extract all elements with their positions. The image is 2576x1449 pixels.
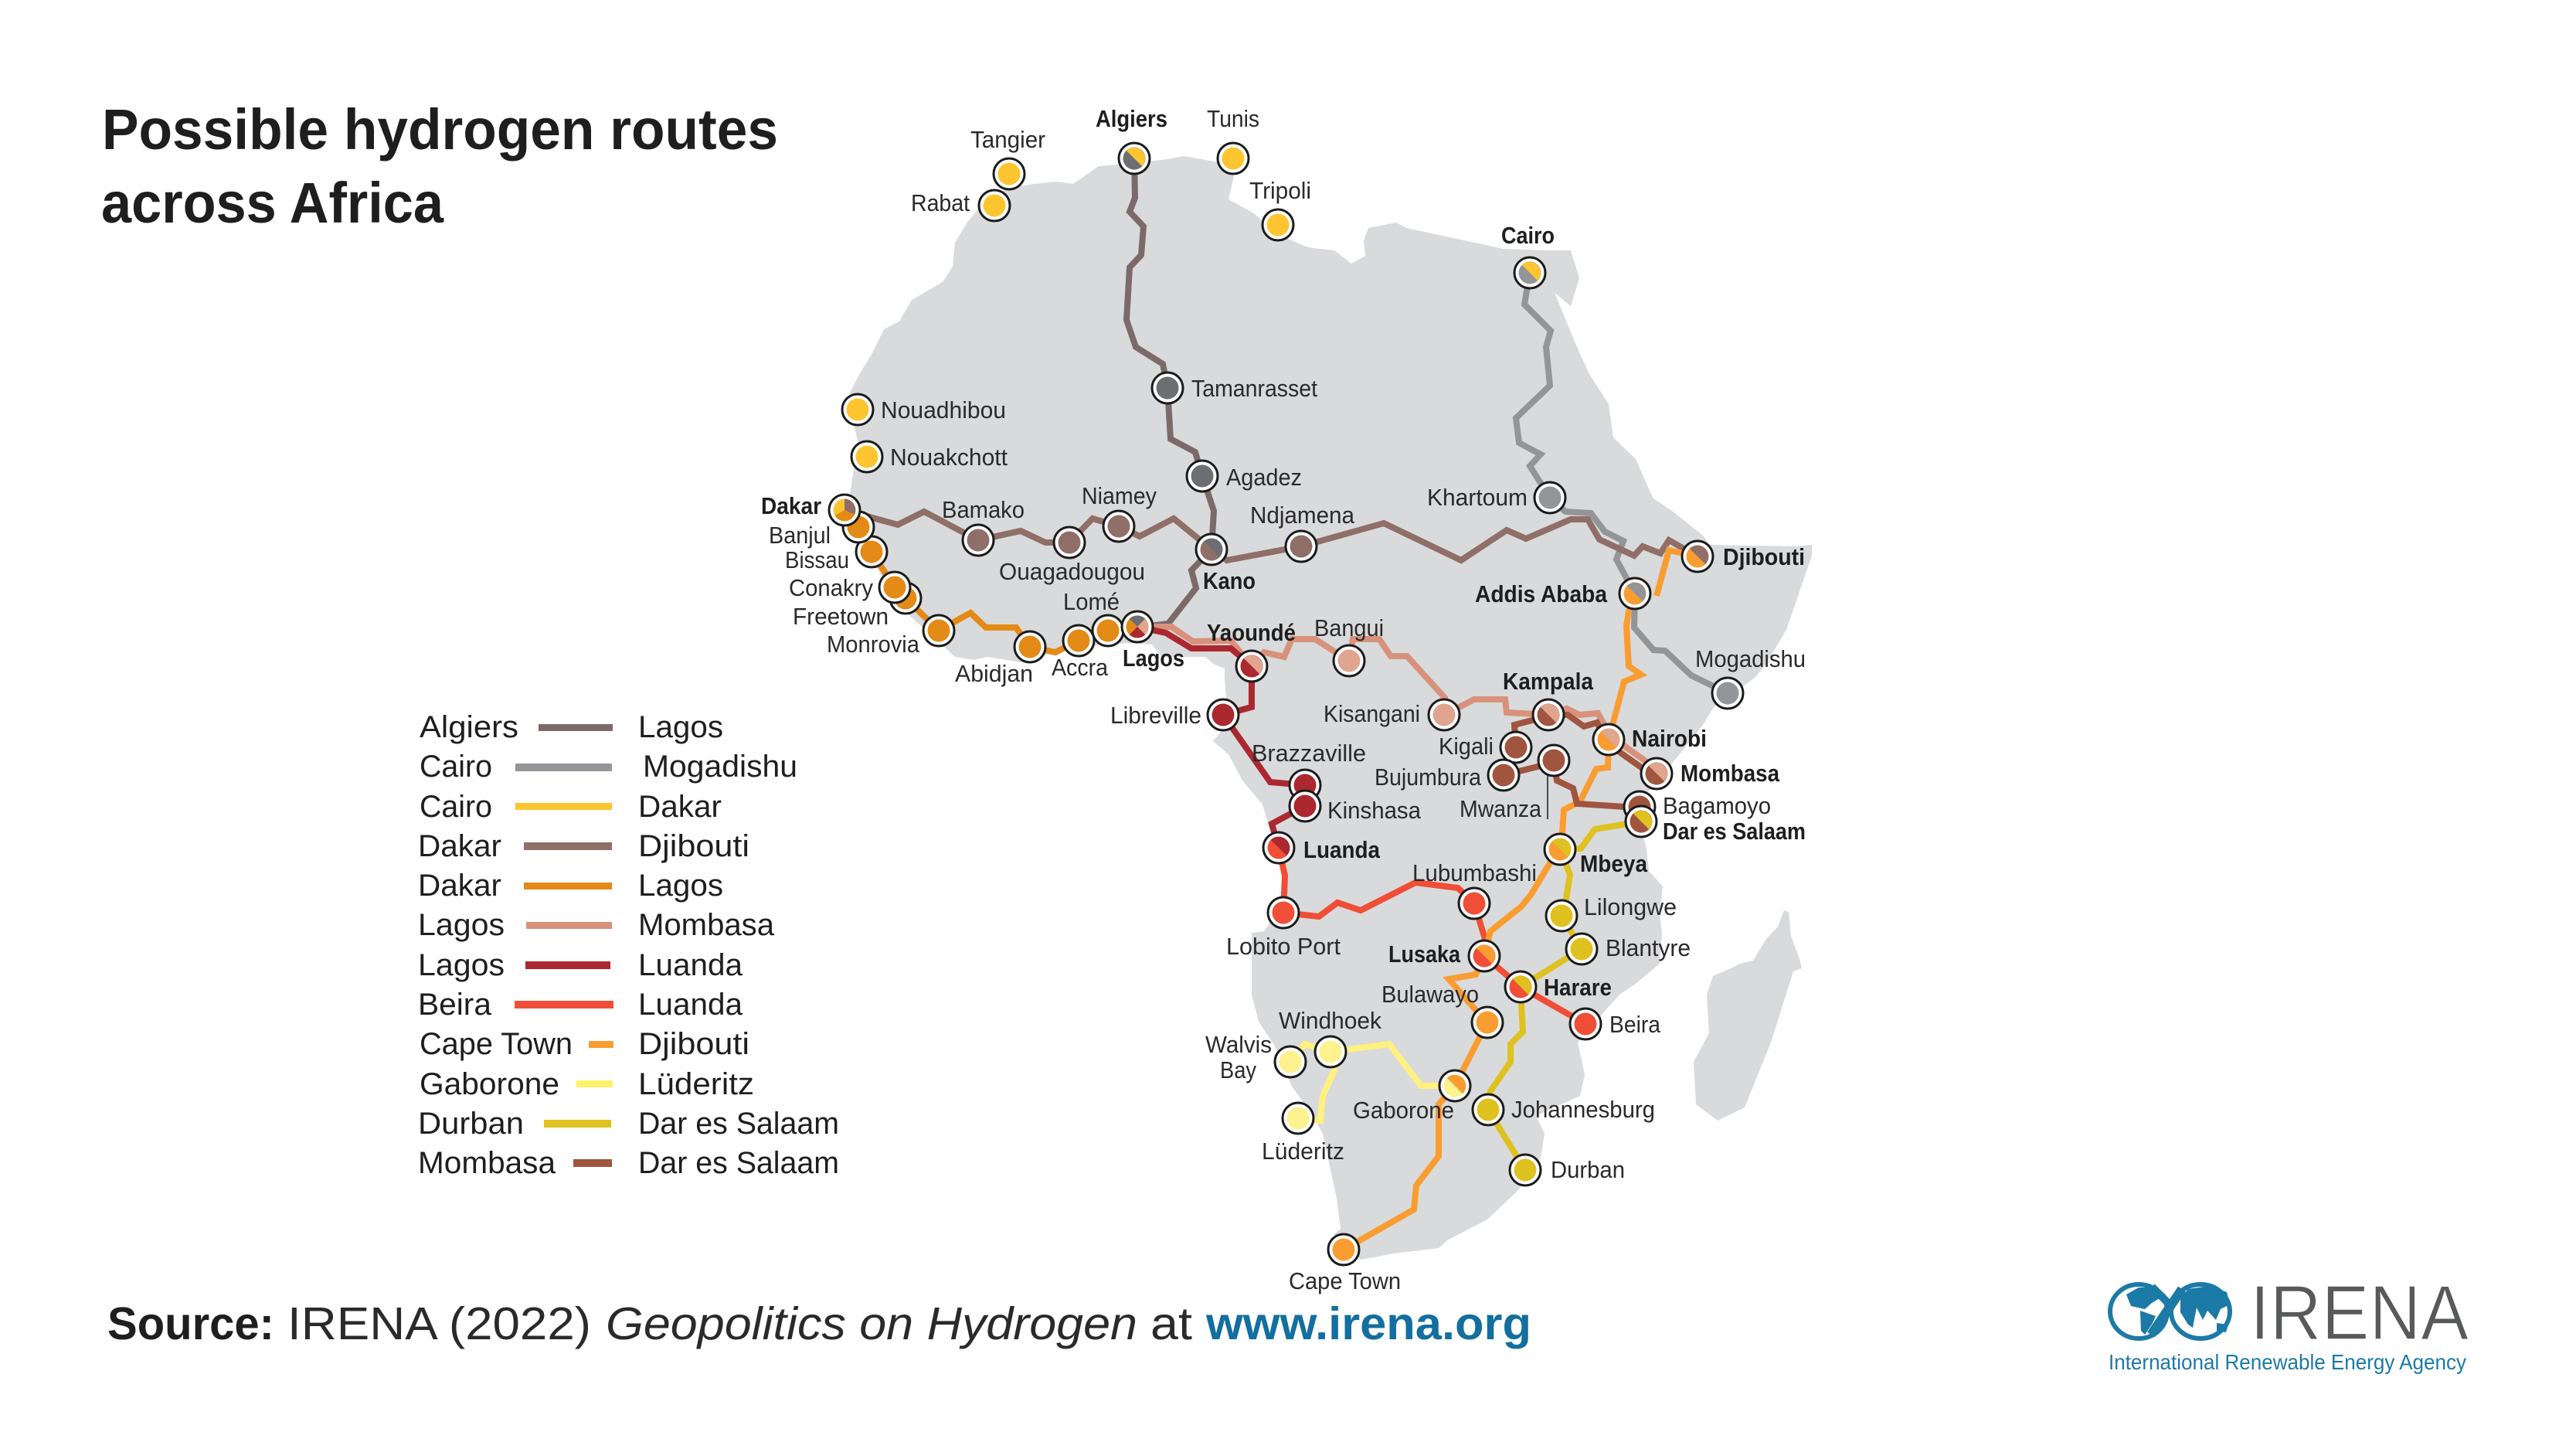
node: Lusaka: Lusaka (1388, 940, 1461, 968)
legend row: Algiers to Lagos: Lagos (638, 710, 723, 744)
node: Luderitz (1262, 1103, 1344, 1165)
legend row: Cairo to Dakar (420, 790, 722, 824)
node: Bamako: Bamako (942, 496, 1025, 523)
node: Mombasa (1641, 758, 1780, 789)
node: Niamey: Niamey (1082, 482, 1157, 509)
source line: Geopolitics on Hydrogen (606, 1298, 1137, 1349)
legend row: Mombasa to Dar es Salaam (418, 1146, 839, 1180)
source line: IRENA (2022) (287, 1298, 591, 1349)
node: Khartoum: Khartoum (1427, 484, 1528, 511)
node: Nouadhibou: Nouadhibou (881, 396, 1006, 423)
node: Nouadhibou (842, 394, 1006, 425)
legend row: Cairo to Mogadishu (420, 750, 797, 784)
node: Kisangani: Kisangani (1324, 700, 1420, 727)
node: Lubumbashi (1412, 859, 1537, 919)
node: Beira: Beira (1609, 1011, 1661, 1038)
title: Possible hydrogen routes (102, 97, 778, 162)
node: Agadez: Agadez (1226, 464, 1302, 491)
node: Dakar (761, 492, 860, 526)
node: Cape Town: Cape Town (1289, 1267, 1401, 1294)
node: Nairobi (1593, 724, 1707, 755)
node: Bangui: Bangui (1314, 614, 1384, 641)
node: Dakar: Dakar (761, 492, 821, 519)
node: Kigali (1439, 732, 1531, 763)
node: Mbeya (1545, 834, 1648, 877)
route: Cairo to Mogadishu (1516, 273, 1728, 693)
legend row: Cape Town to Djibouti (420, 1027, 749, 1061)
node: Blantyre: Blantyre (1606, 934, 1691, 961)
node: Mogadishu (1695, 645, 1806, 709)
route: Dakar to Lagos (845, 510, 1137, 652)
node: Agadez (1187, 461, 1302, 492)
node: Conakry: Conakry (789, 574, 873, 601)
legend row: Cairo to Mogadishu: Mogadishu (643, 750, 797, 784)
node: Bagamoyo (1624, 791, 1771, 822)
node: Beira (1570, 1009, 1661, 1039)
node: Lobito Port (1226, 897, 1341, 960)
source line (107, 1298, 1531, 1349)
node: Lagos: Lagos (1123, 645, 1184, 672)
node: Tripoli (1249, 177, 1311, 240)
node: Banjul: Banjul (769, 522, 831, 549)
land: Madagascar (1694, 910, 1802, 1121)
node: Luderitz: Lüderitz (1262, 1138, 1344, 1165)
node: Tripoli: Tripoli (1249, 177, 1311, 204)
node: Cairo: Cairo (1501, 222, 1555, 249)
node: Algiers (1096, 105, 1167, 174)
legend row: Lagos to Luanda (418, 948, 743, 982)
node: Abidjan: Abidjan (955, 660, 1033, 687)
node: Durban: Durban (1551, 1156, 1625, 1183)
node: Cape Town (1289, 1234, 1401, 1294)
title: across Africa (101, 171, 444, 235)
node: Tangier: Tangier (970, 126, 1045, 153)
node: Djibouti: Djibouti (1723, 543, 1805, 570)
node: Kampala (1503, 668, 1594, 730)
legend row: Cairo to Dakar: Dakar (638, 790, 722, 824)
node: Johannesburg (1473, 1094, 1655, 1125)
node: Yaounde: Yaoundé (1207, 619, 1296, 646)
node: Yaounde (1207, 619, 1296, 682)
node: Mombasa: Mombasa (1681, 760, 1780, 787)
node: Tamanrasset (1152, 372, 1317, 403)
node: Lobito Port: Lobito Port (1226, 933, 1341, 960)
node: Accra: Accra (1052, 654, 1109, 681)
node: Libreville: Libreville (1110, 702, 1201, 729)
node: Cairo (1501, 222, 1555, 288)
legend row: Gaborone to Luderitz: Gaborone (420, 1067, 559, 1101)
legend row: Durban to Dar es Salaam: Dar es Salaam (638, 1107, 839, 1141)
node: Ouagadougou (999, 527, 1145, 585)
node: Algiers: Algiers (1096, 105, 1167, 132)
node: Lilongwe: Lilongwe (1584, 893, 1677, 920)
source line: Source: (107, 1298, 274, 1349)
node: Djibouti (1682, 541, 1805, 572)
node: Kinshasa (1290, 791, 1422, 824)
node: Blantyre (1566, 934, 1691, 964)
node: Monrovia: Monrovia (827, 631, 920, 658)
nodes and city labels (761, 105, 1806, 1294)
title (101, 97, 778, 235)
node: Tunis (1207, 105, 1259, 174)
node: Kano (1196, 534, 1256, 594)
node: Kisangani (1324, 699, 1460, 730)
legend row: Beira to Luanda: Luanda (638, 988, 743, 1022)
node: Mbeya: Mbeya (1580, 850, 1648, 877)
legend row: Cairo to Dakar: Cairo (420, 790, 492, 824)
legend row: Cape Town to Djibouti: Cape Town (420, 1027, 573, 1061)
source line: at (1150, 1298, 1192, 1349)
node: Dar es Salaam: Dar es Salaam (1663, 818, 1806, 845)
node: Nouakchott: Nouakchott (890, 444, 1008, 471)
node: Harare (1505, 971, 1612, 1002)
IRENA logo (2109, 1270, 2469, 1374)
node: Gaborone: Gaborone (1353, 1097, 1454, 1124)
node: Ndjamena (1250, 502, 1355, 562)
legend (418, 710, 839, 1180)
legend row: Mombasa to Dar es Salaam: Dar es Salaam (638, 1146, 839, 1180)
route: Beira to Luanda (1279, 848, 1585, 1024)
node: Brazzaville: Brazzaville (1252, 740, 1366, 767)
node: Lome (1063, 588, 1123, 646)
legend row: Lagos to Mombasa: Mombasa (638, 908, 775, 942)
map of Africa and Madagascar (850, 156, 1812, 1260)
node: Bissau: Bissau (785, 546, 849, 573)
node: Kinshasa: Kinshasa (1327, 797, 1422, 824)
leader line: Mwanza (1547, 767, 1548, 819)
node: Khartoum (1427, 482, 1565, 513)
legend row: Durban to Dar es Salaam (418, 1107, 839, 1141)
node: Bamako (942, 496, 1025, 556)
node: Ndjamena: Ndjamena (1250, 502, 1355, 529)
legend row: Lagos to Luanda: Lagos (418, 948, 505, 982)
node: Mwanza: Mwanza (1460, 795, 1542, 822)
route: Mombasa to Dar es Salaam (1504, 715, 1654, 807)
node: Libreville (1110, 699, 1239, 730)
node: Mwanza (1460, 745, 1569, 822)
node: Kigali: Kigali (1439, 733, 1494, 760)
legend row: Dakar to Lagos: Dakar (418, 869, 501, 903)
legend row: Algiers to Lagos (420, 710, 723, 744)
node: Lome: Lomé (1063, 588, 1120, 615)
node: Brazzaville (1252, 740, 1366, 801)
route: Durban to Dar es Salaam (1488, 821, 1641, 1170)
node: Johannesburg: Johannesburg (1511, 1096, 1655, 1123)
node: Lusaka (1388, 940, 1500, 971)
node: Dar es Salaam (1626, 806, 1806, 845)
node: Freetown (793, 583, 921, 630)
node: Tunis: Tunis (1207, 105, 1259, 132)
node: Ouagadougou: Ouagadougou (999, 558, 1145, 585)
legend row: Beira to Luanda: Beira (418, 988, 492, 1022)
node: Lilongwe (1546, 893, 1677, 931)
legend row: Mombasa to Dar es Salaam: Mombasa (418, 1146, 556, 1180)
node: Banjul (769, 512, 874, 549)
legend row: Gaborone to Luderitz (420, 1067, 754, 1101)
logo wordmark: IRENA (2250, 1270, 2469, 1356)
legend row: Algiers to Lagos: Algiers (420, 710, 518, 744)
legend row: Dakar to Djibouti: Dakar (418, 829, 501, 863)
legend row: Lagos to Mombasa: Lagos (418, 908, 505, 942)
node: Bangui (1314, 614, 1384, 676)
legend row: Dakar to Lagos: Lagos (638, 869, 723, 903)
route: Gaborone to Luderitz (1290, 1044, 1455, 1121)
legend row: Lagos to Mombasa (418, 908, 775, 942)
node: Durban (1510, 1155, 1625, 1185)
node: Nouakchott (851, 441, 1008, 472)
node: Windhoek: Windhoek (1279, 1007, 1381, 1034)
logo tagline: International Renewable Energy Agency (2109, 1350, 2466, 1374)
routes (845, 158, 1728, 1250)
legend row: Lagos to Luanda: Luanda (638, 948, 743, 982)
legend row: Dakar to Djibouti: Djibouti (638, 829, 749, 863)
node: Lubumbashi: Lubumbashi (1412, 859, 1537, 886)
route: Algiers to Lagos (1127, 158, 1214, 628)
legend row: Cape Town to Djibouti: Djibouti (638, 1027, 749, 1061)
node: Bujumbura: Bujumbura (1375, 764, 1482, 791)
logo mark: infinity globes (2110, 1284, 2230, 1338)
node: Bulawayo: Bulawayo (1381, 981, 1479, 1008)
node: Monrovia (827, 615, 954, 658)
legend row: Durban to Dar es Salaam: Durban (418, 1107, 524, 1141)
route: Dakar to Djibouti (845, 510, 1698, 560)
route: Lagos to Mombasa (1137, 627, 1659, 770)
route: Lagos to Luanda (1137, 627, 1305, 848)
node: Freetown: Freetown (793, 603, 889, 630)
land: African continent (850, 156, 1812, 1260)
node: Walvis Bay: Walvis (1205, 1031, 1272, 1058)
node: Luanda: Luanda (1303, 836, 1381, 863)
node: Mogadishu: Mogadishu (1695, 645, 1806, 672)
node: Windhoek (1279, 1007, 1381, 1067)
node: Harare: Harare (1544, 974, 1612, 1001)
node: Luanda (1263, 832, 1381, 863)
node: Lagos (1122, 611, 1184, 672)
node: Abidjan (955, 631, 1045, 687)
route: Cape Town to Djibouti (1344, 550, 1698, 1250)
node: Kano: Kano (1203, 567, 1256, 594)
node: Addis Ababa: Addis Ababa (1475, 580, 1608, 607)
node: Gaborone (1353, 1070, 1470, 1124)
node: Bissau (785, 536, 887, 573)
node: Rabat (911, 189, 1010, 221)
node: Walvis Bay: Bay (1220, 1056, 1256, 1083)
node: Niamey (1082, 482, 1157, 542)
legend row: Beira to Luanda (418, 988, 743, 1022)
node: Conakry (789, 572, 910, 603)
legend row: Cairo to Mogadishu: Cairo (420, 750, 492, 784)
node: Accra (1052, 625, 1109, 681)
node: Bulawayo (1381, 981, 1503, 1038)
node: Walvis Bay (1205, 1031, 1306, 1083)
source line: www.irena.org (1205, 1298, 1531, 1349)
node: Nairobi: Nairobi (1632, 725, 1707, 752)
node: Tamanrasset: Tamanrasset (1191, 375, 1317, 402)
legend row: Gaborone to Luderitz: Lüderitz (638, 1067, 754, 1101)
node: Bagamoyo: Bagamoyo (1663, 792, 1771, 819)
node: Kampala: Kampala (1503, 668, 1594, 695)
node: Tangier (970, 126, 1045, 189)
node: Rabat: Rabat (911, 189, 970, 216)
legend row: Dakar to Lagos (418, 869, 723, 903)
legend row: Dakar to Djibouti (418, 829, 749, 863)
